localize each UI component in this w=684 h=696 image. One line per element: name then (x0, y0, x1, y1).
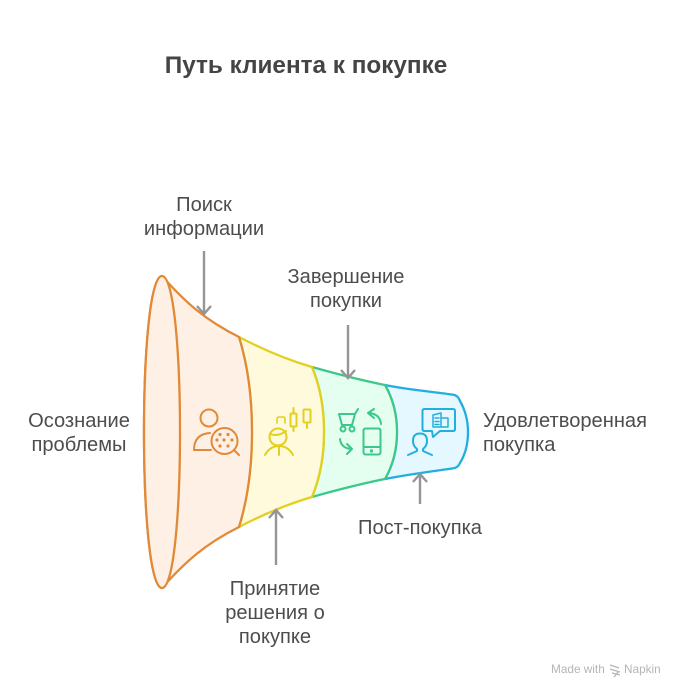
label: awareness: Осознание (28, 410, 130, 432)
label: satisfied purchase: Удовлетворенная (483, 410, 647, 432)
watermark: Napkin (624, 662, 661, 676)
label: awareness (28, 410, 130, 456)
label: decision: Принятие (230, 578, 320, 600)
label: information search: Поиск (176, 194, 232, 216)
segment: post-purchase (blue) (385, 385, 468, 479)
icon: cart, phone and arrows (339, 409, 381, 454)
label: satisfied purchase: покупка (483, 434, 556, 456)
icon: person with speech bubble (408, 409, 455, 455)
label: decision (225, 578, 325, 648)
label: post-purchase: Пост-покупка (358, 517, 483, 539)
label: awareness: проблемы (32, 434, 126, 456)
segment: awareness ellipse (orange) (144, 276, 180, 588)
arrow: completing the purchase (341, 325, 355, 378)
label: decision: покупке (239, 626, 311, 648)
label: information search: информации (144, 218, 264, 240)
icon: person with magnifier (194, 410, 239, 455)
label: completing the purchase: покупки (310, 290, 382, 312)
funnel (144, 276, 468, 588)
segment: information search (orange) (144, 276, 252, 588)
segment: decision (yellow) (239, 337, 324, 527)
label: satisfied purchase (483, 410, 647, 456)
arrow: decision (269, 510, 283, 565)
label: information search (144, 194, 264, 240)
title: Путь клиента к покупке (165, 52, 447, 79)
arrow: post-purchase (413, 474, 427, 504)
icon: person with candlesticks (265, 408, 310, 455)
label: completing the purchase: Завершение (288, 266, 404, 288)
watermark (551, 662, 661, 677)
watermark: Made with (551, 662, 605, 676)
label: completing the purchase (288, 266, 404, 312)
segment: completing the purchase (green) (312, 367, 397, 497)
label: decision: решения о (225, 602, 325, 624)
arrow: information search (197, 251, 211, 314)
